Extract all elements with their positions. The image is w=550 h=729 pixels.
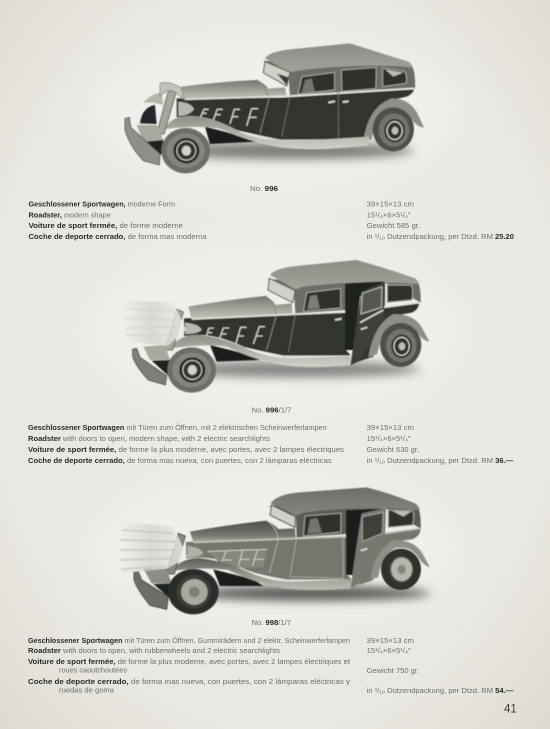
description block: No. 998/1/7: Coche de deporte cerrado, de forma mas nueva, con puertes, con 2 lámparas eléctricas y (28, 677, 350, 686)
description block: No. 998/1/7 (28, 636, 350, 694)
bumper (133, 348, 167, 385)
roof (271, 487, 420, 515)
specifications: No. 996: in ¹/₁₀ Dutzendpackung, per Dtzd. RM 25.20 (367, 232, 514, 241)
description block: No. 998/1/7: roues caoutchoutées (59, 666, 127, 674)
specifications: No. 998/1/7: 15¹/₄×6×5¹/₄" (367, 646, 411, 655)
headlight (187, 546, 203, 557)
specifications: No. 998/1/7 (367, 636, 514, 695)
rear wheel (381, 549, 421, 590)
hood (190, 521, 296, 542)
door lines (282, 72, 339, 137)
specifications: No. 996/1/7: in ¹/₁₀ Dutzendpackung, per Dtzd. RM 36.— (367, 456, 514, 465)
roof (265, 43, 413, 73)
front fender and running board (172, 335, 351, 367)
car illustration: No. 998/1/7 (118, 487, 430, 614)
rear fender (368, 314, 429, 357)
description block: No. 998/1/7: Voiture de sport fermée, de forme la plus moderne, avec portes, avec 2 lampes électriques et (28, 657, 350, 666)
description block: No. 996: Geschlossener Sportwagen, moderne Form (28, 200, 175, 208)
windows (270, 505, 295, 527)
roof (270, 260, 419, 289)
front wheel (167, 347, 216, 393)
rear fender (363, 98, 424, 141)
open door (351, 281, 385, 365)
description block: No. 998/1/7: Geschlossener Sportwagen mit Türen zum Öffnen, Gummirädern und 2 elektr. Scheinwerferlampen (28, 636, 350, 645)
specifications: No. 996/1/7 (367, 423, 514, 465)
description block: No. 996/1/7: Geschlossener Sportwagen mit Türen zum Öffnen, mit 2 elektrischen Scheinwerferlampen (28, 423, 327, 432)
specifications: No. 996: Gewicht 585 gr. (367, 221, 420, 230)
specifications: No. 996/1/7: Gewicht 630 gr. (367, 445, 419, 454)
caption: No. 996/1/7: No. 996/1/7 (252, 406, 292, 414)
headlight (178, 102, 194, 116)
lower body (186, 536, 352, 579)
front wheel (161, 128, 210, 173)
hood (181, 80, 287, 99)
bumper (134, 572, 168, 609)
specifications: No. 996/1/7: 39×15×13 cm (367, 423, 414, 432)
headlight (185, 323, 202, 334)
headlight beam (120, 300, 186, 346)
cabin (268, 503, 421, 537)
description block: No. 998/1/7: ruedas de goma (59, 686, 114, 694)
description block: No. 996/1/7: Coche de deporte cerrado, de forma mas nueva, con puertes, con 2 lámparas eléctricas (28, 456, 332, 465)
radiator grille (157, 90, 176, 134)
description block: No. 996/1/7: Voiture de sport fermée, de forme la plus moderne, avec portes, avec 2 lampes électriques (28, 445, 344, 454)
description block: No. 996: Coche de deporte cerrado, de forma mas moderna (28, 232, 207, 241)
description block: No. 996/1/7 (28, 423, 344, 465)
lower body (184, 313, 351, 355)
description block: No. 996 (28, 200, 207, 241)
rear wheel (380, 323, 421, 367)
door opening (346, 508, 385, 575)
car illustration: No. 996/1/7 (120, 260, 429, 393)
description block: No. 996/1/7: Roadster with doors to open, modern shape, with 2 electric searchlights (28, 434, 270, 443)
cabin (263, 61, 415, 97)
belt line (185, 88, 414, 99)
door opening (345, 281, 384, 350)
rear fender (370, 540, 430, 579)
front fender and running board (173, 558, 352, 590)
caption: No. 998/1/7: No. 998/1/7 (252, 618, 291, 627)
page number: 41 (504, 704, 517, 716)
hood vents (200, 109, 258, 126)
rear wheel (373, 107, 414, 151)
hood (188, 296, 293, 319)
windows (263, 62, 290, 86)
windows (268, 278, 295, 303)
specifications: No. 998/1/7: 39×15×13 cm (367, 636, 414, 645)
specifications: No. 996: 39×15×13 cm (367, 200, 414, 208)
headlight beam (118, 522, 187, 574)
hood vents (207, 327, 265, 344)
specifications: No. 996 (367, 200, 514, 241)
specifications: No. 996: 15¹/₄×6×5¹/₄" (367, 210, 411, 219)
bumper (125, 117, 160, 165)
cabin (267, 278, 421, 313)
open door (351, 508, 386, 588)
front wheel (168, 569, 219, 614)
description block: No. 998/1/7: Roadster with doors to open, with rubberwheels and 2 electric searchlights (28, 646, 280, 655)
front fender and running board (165, 116, 369, 149)
specifications: No. 998/1/7: in ¹/₁₀ Dutzendpackung, per Dtzd. RM 54.— (367, 686, 514, 695)
specifications: No. 996/1/7: 15¹/₄×6×5¹/₄" (367, 434, 411, 443)
specifications: No. 998/1/7: Gewicht 750 gr. (367, 666, 419, 675)
description block: No. 996: Voiture de sport fermée, de forme moderne (28, 221, 183, 230)
belt line (193, 528, 420, 542)
car illustration: No. 996 (125, 43, 424, 173)
caption: No. 996: No. 996 (250, 184, 278, 193)
hood vents panel (207, 549, 267, 567)
lower body (177, 89, 414, 139)
belt line (192, 303, 419, 319)
description block: No. 996: Roadster, modern shape (28, 210, 111, 219)
